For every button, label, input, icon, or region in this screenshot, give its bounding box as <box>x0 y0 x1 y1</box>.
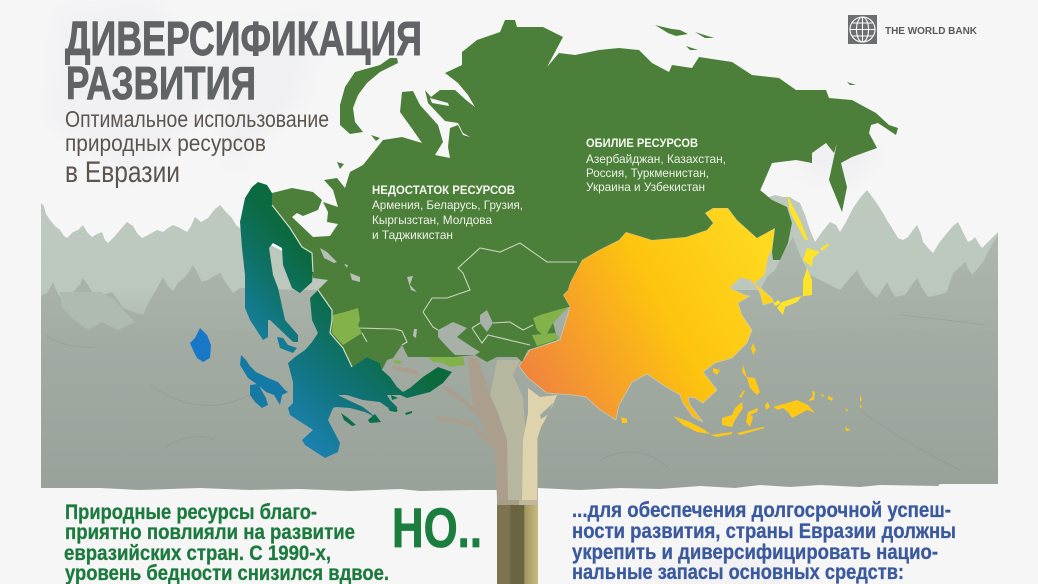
label: resource-rich countries: Азербайджан, Казахстан, <box>586 152 726 166</box>
text block: natural resources benefit: Природные ресурсы благо- <box>65 501 317 524</box>
national borders <box>358 243 577 345</box>
logo: The World Bank <box>848 15 977 44</box>
subtitle <box>65 106 329 189</box>
border between Europe and Russia <box>272 205 352 367</box>
tree trunk and branches <box>392 357 557 584</box>
label: resource-rich countries: Украина и Узбекистан <box>586 180 705 194</box>
label: resource-poor countries: Кыргызстан, Молдова <box>372 213 492 227</box>
far tree line <box>41 190 998 340</box>
label: resource-poor countries <box>372 183 523 242</box>
text block: natural resources benefit: приятно повлияли на развитие <box>65 521 355 544</box>
Denmark <box>277 337 297 353</box>
text block: natural resources benefit: евразийских стран. С 1990-х, <box>64 542 331 565</box>
Scandinavia <box>240 182 313 342</box>
title <box>65 13 422 109</box>
title: РАЗВИТИЯ <box>66 57 256 109</box>
label: resource-rich countries <box>586 136 726 194</box>
continental Europe <box>288 290 452 458</box>
icon: globe <box>850 17 875 42</box>
text block: natural resources benefit <box>64 501 389 584</box>
map: Asia islands in yellow <box>621 343 862 437</box>
Britain <box>240 355 288 405</box>
title: ДИВЕРСИФИКАЦИЯ <box>65 13 422 66</box>
heading: but: НО.. <box>392 496 482 559</box>
map: Europe <box>240 182 452 458</box>
subtitle: в Евразии <box>65 156 180 189</box>
map: Japan and Sakhalin <box>773 195 829 315</box>
Arctic islands <box>333 25 856 183</box>
subtitle: природных ресурсов <box>65 130 266 156</box>
label: resource-rich countries: ОБИЛИЕ РЕСУРСОВ <box>586 136 698 150</box>
label: resource-poor countries: НЕДОСТАТОК РЕСУРСОВ <box>372 183 515 197</box>
text block: diversification call: ...для обеспечения долгосрочной успеш- <box>572 499 951 522</box>
left brown limb <box>468 357 508 500</box>
near tree line <box>41 235 998 345</box>
label: resource-poor countries: и Таджикистан <box>372 228 453 242</box>
Iceland <box>190 328 211 362</box>
text block: diversification call: ности развития, страны Евразии должны <box>572 520 956 543</box>
label: resource-poor countries: Армения, Беларусь, Грузия, <box>372 198 523 212</box>
inland lakes <box>320 248 417 338</box>
white inlets <box>430 98 449 106</box>
label: resource-rich countries: Россия, Туркменистан, <box>586 166 709 180</box>
text block: diversification call: укрепить и диверсифицировать нацио- <box>572 541 938 564</box>
Caspian Sea <box>438 322 480 355</box>
subtitle: Оптимальное использование <box>65 106 329 132</box>
logo: The World Bank: THE WORLD BANK <box>885 25 977 37</box>
left branches <box>392 367 495 448</box>
Novaya Zemlya <box>340 58 398 134</box>
map: main green Eurasia <box>272 20 898 370</box>
map: Asia mainland <box>519 208 775 422</box>
Mediterranean islands <box>341 395 412 426</box>
text block: diversification call <box>572 499 956 584</box>
centre limb <box>490 360 526 500</box>
text block: diversification call: нальные запасы основных средств: <box>572 561 904 584</box>
grey forest panel <box>41 190 998 505</box>
Aral Sea <box>480 310 493 332</box>
right pale limb <box>522 388 557 500</box>
light green countries <box>332 307 568 370</box>
light gaps in the lower forest <box>60 292 135 330</box>
stump <box>497 505 538 584</box>
panel base <box>41 330 998 505</box>
Ireland <box>250 384 268 408</box>
